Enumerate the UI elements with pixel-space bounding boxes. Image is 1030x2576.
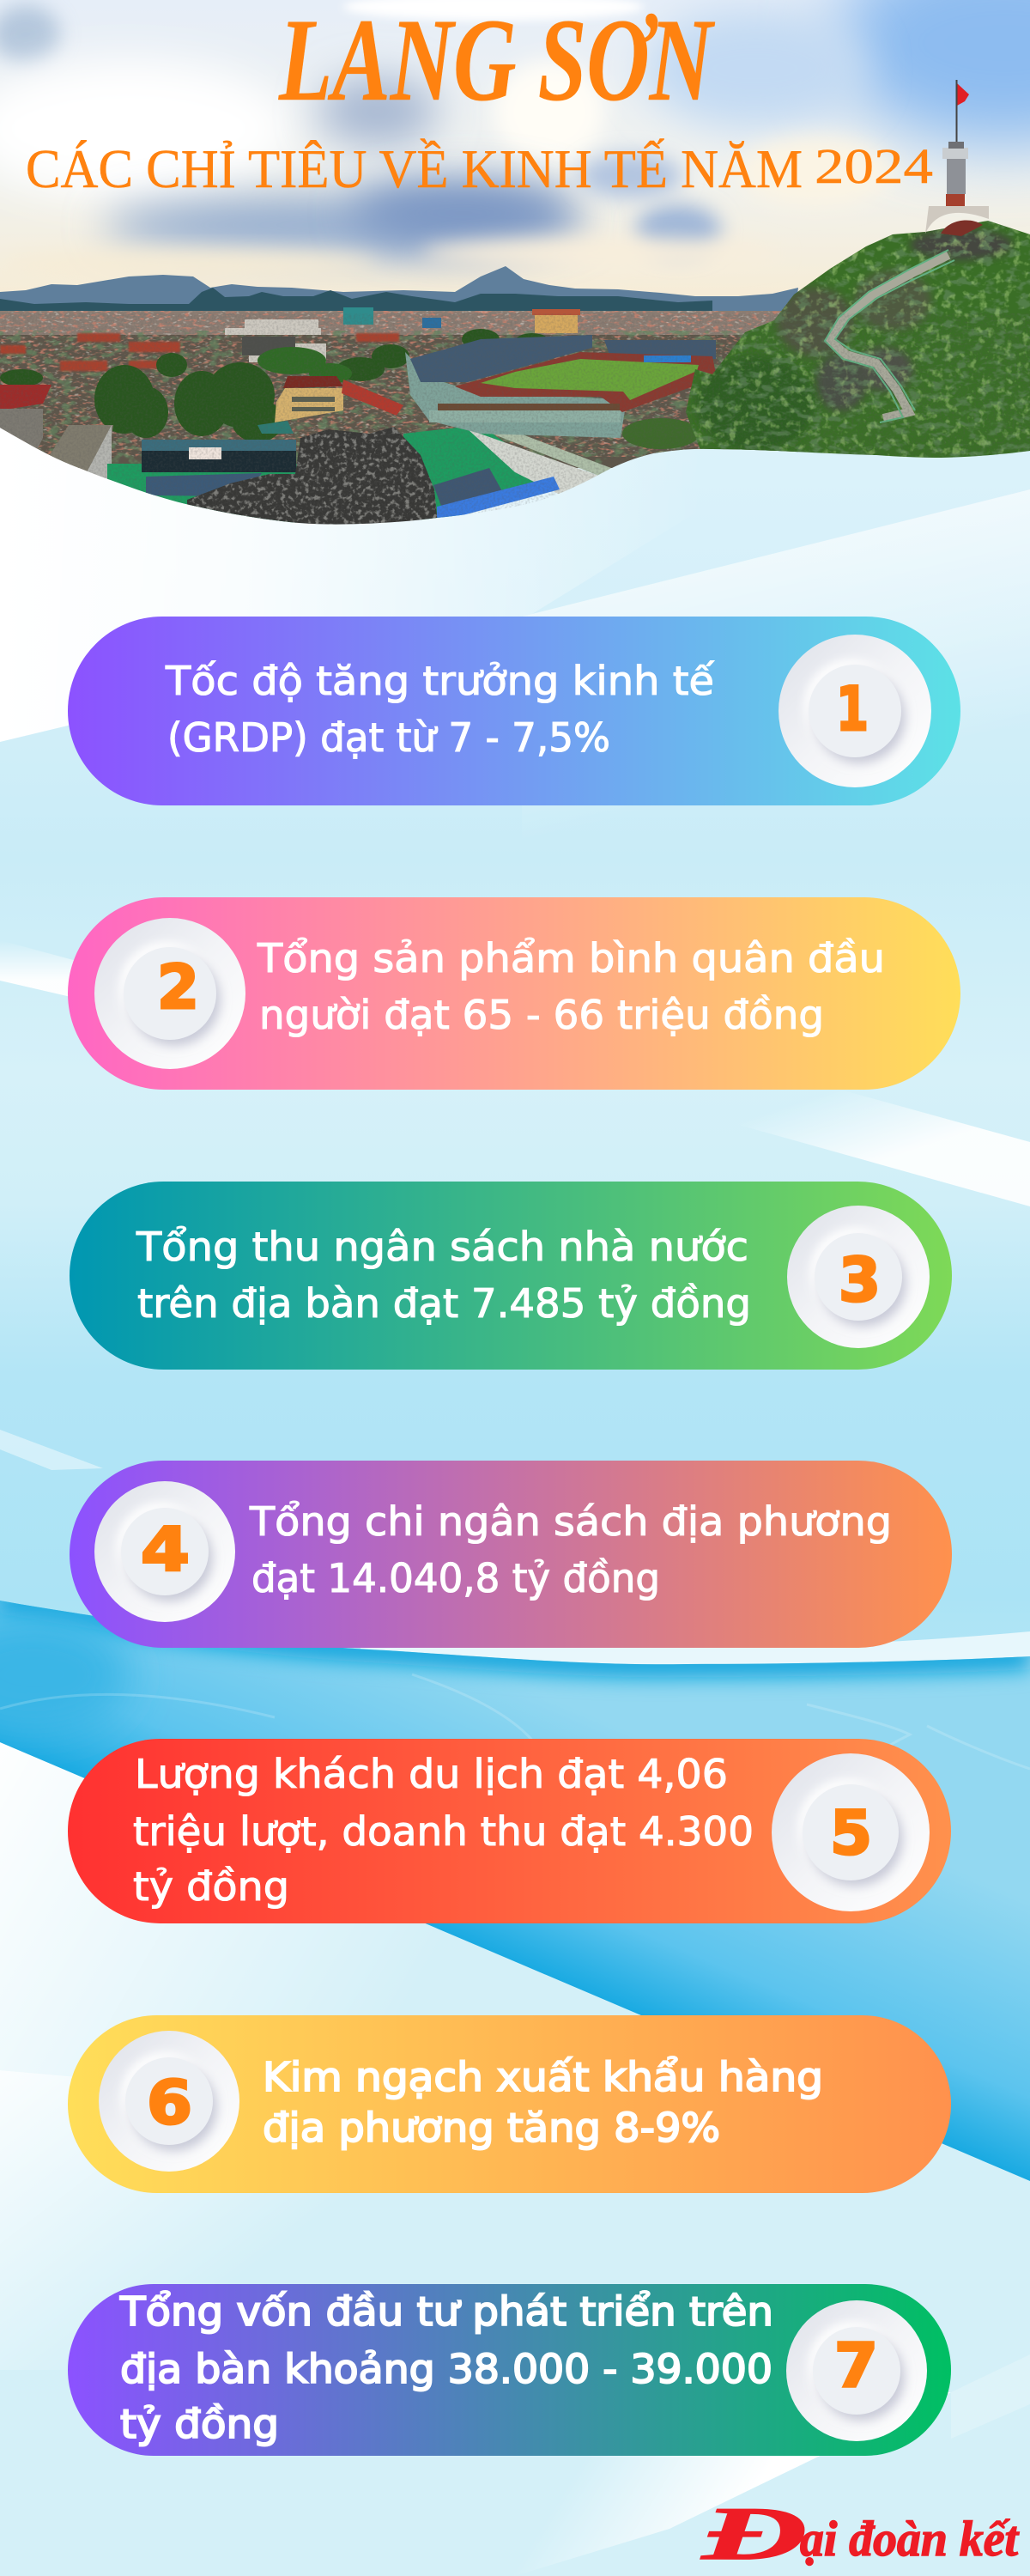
badge 3: 3: [839, 1245, 881, 1315]
text 4: Tổng chi ngân sách địa phương: [249, 1498, 892, 1545]
badge 2: [94, 918, 245, 1069]
badge 7: 7: [834, 2330, 878, 2401]
panel 2: GRDP per capita: [68, 897, 960, 1090]
stadium: [405, 335, 717, 438]
panel 3: state budget revenue: [70, 1182, 952, 1370]
city blocks and rooftops: [0, 307, 798, 489]
text 5: [133, 1751, 754, 1910]
text 5: Lượng khách du lịch đạt 4,06: [135, 1751, 728, 1797]
badge 5: 5: [830, 1798, 872, 1868]
logo: Dai doan ket: [700, 2493, 1020, 2576]
badge 6: [99, 2031, 239, 2172]
text 2: người đạt 65 - 66 triệu đồng: [259, 992, 824, 1038]
text 1: Tốc độ tăng trưởng kinh tế: [165, 658, 715, 704]
title: [26, 0, 933, 199]
badge 6: 6: [147, 2068, 192, 2138]
subtitle year: 2024: [815, 138, 933, 194]
text 1: [165, 658, 715, 761]
text 4: [249, 1498, 892, 1601]
logo: Dai doan ket: Đ: [700, 2493, 807, 2576]
text 7: Tổng vốn đầu tư phát triển trên: [119, 2288, 773, 2335]
trees: [0, 329, 700, 449]
text 6: địa phương tăng 8-9%: [263, 2105, 720, 2151]
hill with stairs: [686, 221, 1030, 458]
panel 1: GRDP growth: [68, 617, 960, 805]
sports courts and billboard: [107, 414, 611, 524]
badge 7: [786, 2300, 927, 2441]
text 6: [263, 2054, 823, 2151]
distant mountains: [0, 266, 798, 311]
text 7: [119, 2288, 773, 2447]
badge 3: [787, 1206, 930, 1348]
badge 1: [779, 635, 931, 787]
text 2: Tổng sản phẩm bình quân đầu: [257, 935, 885, 981]
text 1: (GRDP) đạt từ 7 - 7,5%: [167, 714, 610, 761]
fine photo texture: [0, 313, 1030, 528]
badge 1: 1: [836, 674, 869, 744]
header photo: Lang Son city panorama: [0, 0, 1030, 532]
logo: Dai doan ket: ại đoàn kết: [800, 2511, 1020, 2567]
badge 5: [772, 1753, 930, 1911]
text 3: [136, 1224, 751, 1327]
panel 4: local budget spending: [70, 1461, 952, 1648]
office buildings: [225, 319, 326, 362]
badge 2: 2: [157, 952, 199, 1023]
text 2: [257, 935, 885, 1038]
text 5: triệu lượt, doanh thu đạt 4.300: [133, 1808, 754, 1855]
yellow school building: [275, 388, 343, 422]
text 7: địa bàn khoảng 38.000 - 39.000: [120, 2346, 772, 2392]
sky with clouds: [0, 0, 1030, 301]
panel 7: investment capital: [68, 2284, 951, 2456]
text 3: Tổng thu ngân sách nhà nước: [136, 1224, 748, 1270]
subtitle: CÁC CHỈ TIÊU VỀ KINH TẾ NĂM: [26, 138, 803, 199]
text 5: tỷ đồng: [133, 1863, 289, 1910]
flag tower: [925, 80, 989, 236]
text 4: đạt 14.040,8 tỷ đồng: [251, 1555, 660, 1601]
text 7: tỷ đồng: [120, 2401, 279, 2447]
panel 6: exports: [68, 2015, 951, 2193]
text 6: Kim ngạch xuất khẩu hàng: [263, 2054, 823, 2100]
badge 4: 4: [141, 1515, 190, 1585]
badge 4: [94, 1481, 235, 1622]
panel 5: tourism: [68, 1739, 951, 1923]
red roof corner building: [0, 385, 52, 410]
text 3: trên địa bàn đạt 7.485 tỷ đồng: [137, 1280, 751, 1327]
limestone rock foreground: [187, 427, 438, 525]
